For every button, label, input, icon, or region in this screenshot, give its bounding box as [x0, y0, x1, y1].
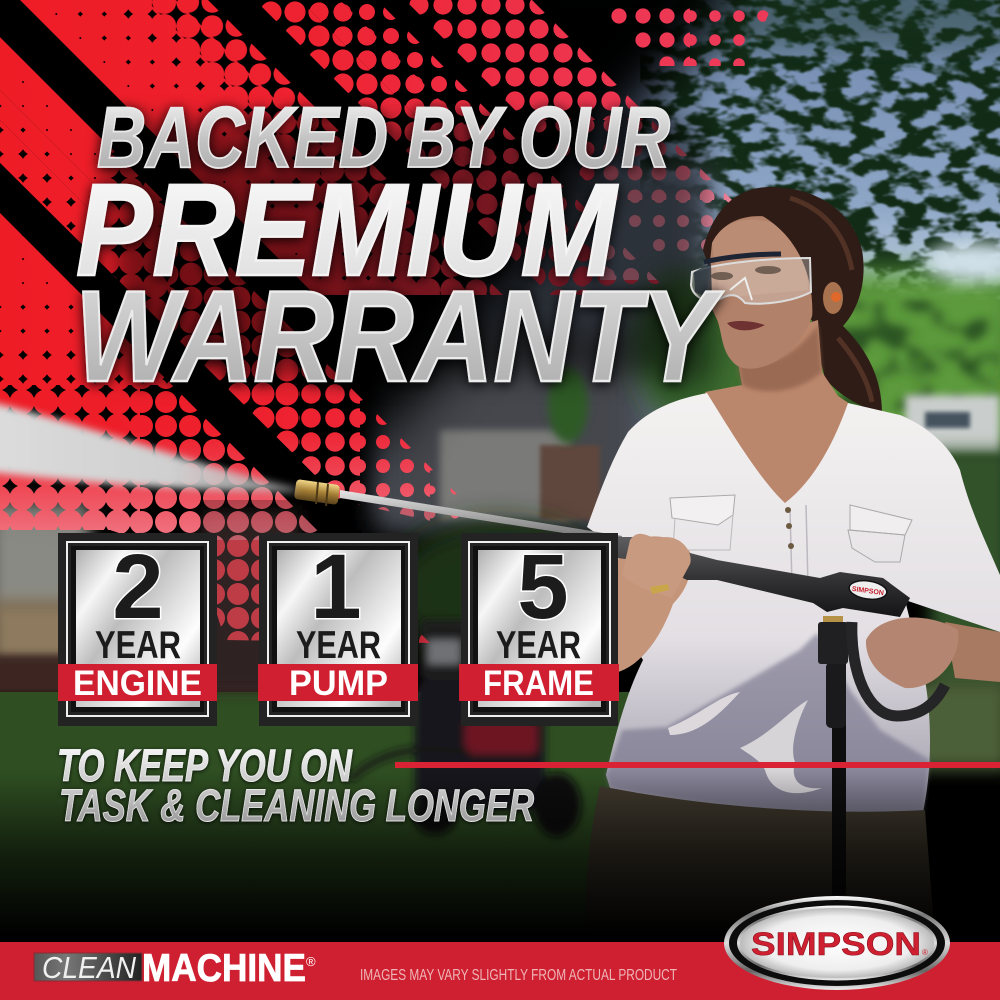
simpson logo: SIMPSON	[751, 926, 921, 962]
title: backed by our premium warranty: WARRANTY	[75, 263, 724, 409]
face	[707, 216, 816, 369]
spray nozzle	[294, 479, 340, 506]
clean machine logo: CLEAN	[42, 950, 137, 985]
pressure washer blurred	[350, 620, 581, 837]
disclaimer: IMAGES MAY VARY SLIGHTLY FROM ACTUAL PRODUCT	[360, 967, 677, 984]
hair back and ponytail	[703, 187, 882, 414]
heading shade behind title	[115, 125, 705, 375]
tagline: TASK & CLEANING LONGER	[59, 780, 534, 831]
shirt placket and pockets	[670, 495, 912, 585]
halftone red dots	[0, 0, 768, 643]
badge: 2 year engine: YEAR	[95, 624, 181, 667]
tagline: TO KEEP YOU ON	[57, 740, 353, 791]
badge: 1 year pump	[258, 533, 418, 726]
simpson logo: ®	[922, 948, 928, 957]
safety goggles	[691, 254, 811, 304]
simpson logo	[724, 896, 950, 990]
shirt	[587, 393, 1000, 814]
lips	[727, 321, 765, 330]
pants	[585, 786, 935, 940]
badge: 1 year pump: PUMP	[289, 664, 388, 703]
title: backed by our premium warranty: PREMIUM	[76, 156, 619, 303]
title: backed by our premium warranty: BACKED BY OUR	[97, 90, 670, 186]
ear with earplug	[823, 282, 843, 314]
badge: 5 year frame: 5	[517, 536, 569, 638]
badge: 5 year frame	[459, 533, 619, 726]
black background fade	[0, 0, 760, 490]
title: backed by our premium warranty	[75, 90, 724, 409]
gripping hand	[866, 618, 958, 688]
spray wand	[340, 490, 622, 542]
gun logo: SIMPSON	[851, 586, 884, 597]
neck shadow	[736, 325, 822, 391]
forearms and hands	[612, 536, 691, 672]
badge: 5 year frame: YEAR	[496, 624, 581, 667]
footer bar	[0, 942, 1000, 1000]
badge: 5 year frame: FRAME	[483, 664, 594, 703]
badge: 1 year pump: 1	[310, 536, 362, 638]
clean machine logo	[34, 947, 316, 990]
badge: 2 year engine: 2	[112, 536, 164, 638]
woman	[294, 187, 1000, 940]
gun logo	[848, 578, 888, 602]
badge: 2 year engine: ENGINE	[73, 664, 202, 703]
shirt shadow	[606, 633, 930, 814]
tagline	[57, 740, 534, 831]
badge: 1 year pump: YEAR	[296, 624, 381, 667]
red divider line	[395, 762, 1000, 768]
spray gun body	[617, 537, 910, 617]
hose	[818, 616, 848, 895]
clean machine logo: ®	[306, 954, 316, 969]
bottom fade to black	[0, 770, 1000, 945]
spray jet	[0, 402, 296, 492]
badge: 2 year engine	[58, 533, 217, 726]
fingers over gun	[622, 534, 691, 598]
trigger guard	[852, 622, 945, 716]
clean machine logo: MACHINE	[142, 947, 306, 990]
neck and chest skin	[705, 320, 850, 505]
